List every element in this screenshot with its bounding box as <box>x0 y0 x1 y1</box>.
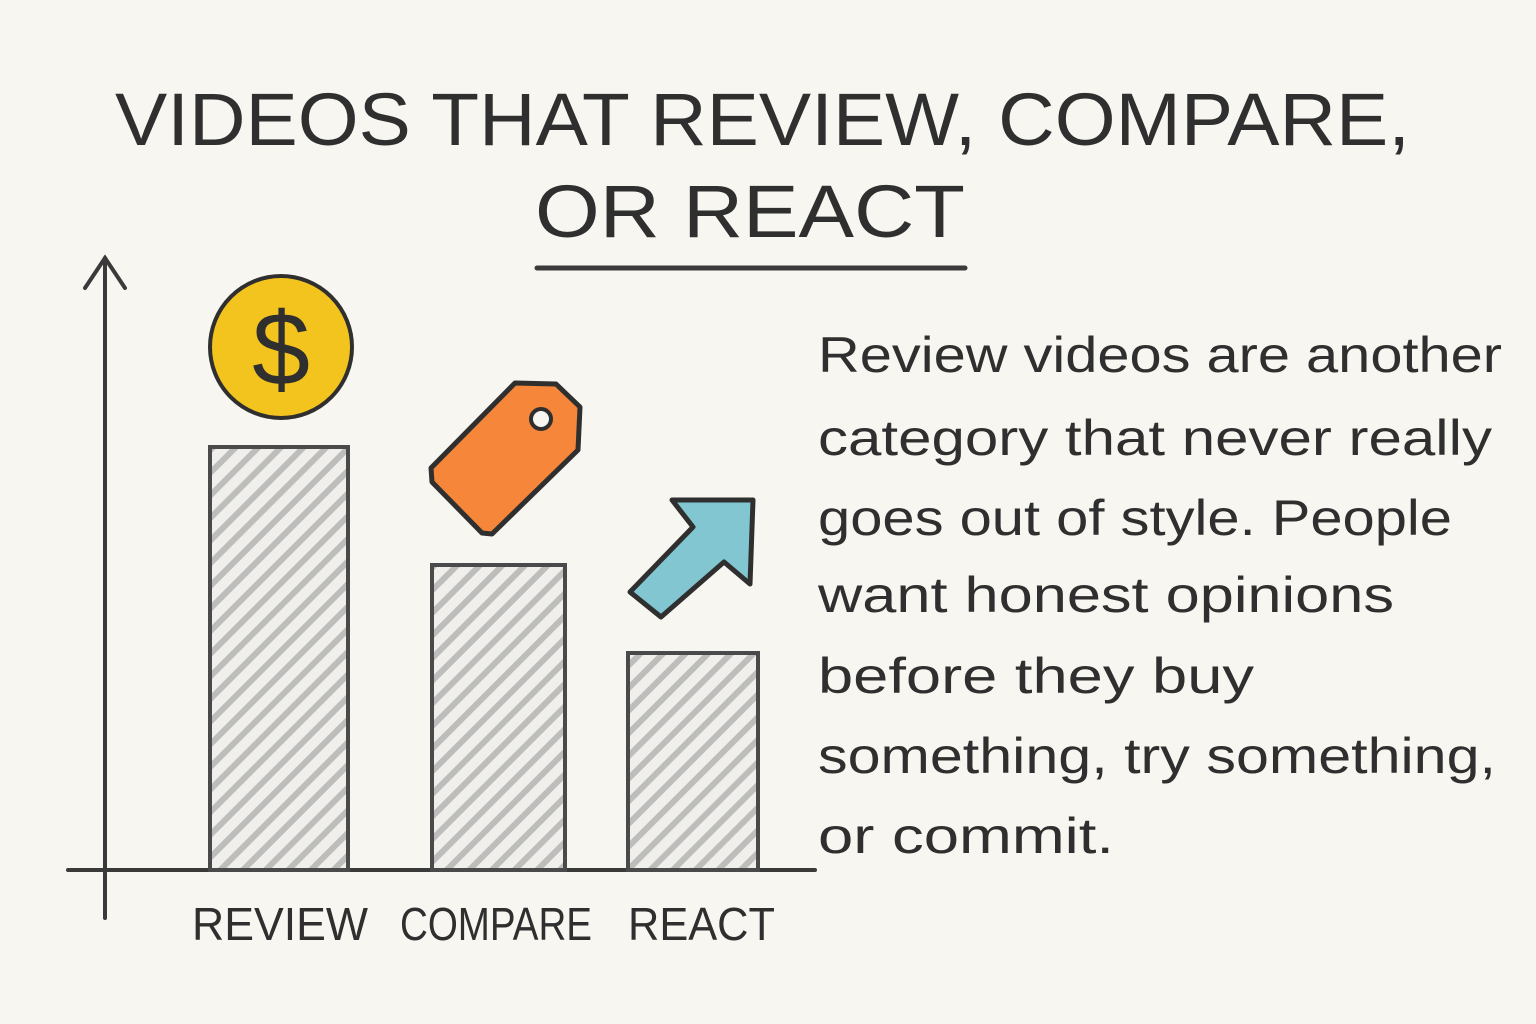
body text: or commit. <box>818 808 1114 864</box>
bar labels: REACT <box>628 898 775 950</box>
bar: review <box>210 447 348 870</box>
body text: Review videos are another <box>818 327 1502 383</box>
title <box>115 78 1410 253</box>
body text: goes out of style. People <box>818 490 1452 546</box>
bar labels: COMPARE <box>400 898 592 950</box>
title underline <box>537 266 965 270</box>
bar labels: REVIEW <box>192 898 369 950</box>
bar chart <box>210 447 758 870</box>
body text <box>817 327 1502 864</box>
body text: before they buy <box>818 648 1254 704</box>
icon: price tag <box>431 383 580 534</box>
icon: up arrow <box>630 500 753 617</box>
bar labels <box>192 898 775 950</box>
body text: something, try something, <box>818 728 1496 784</box>
icon: dollar coin: $ <box>252 292 310 408</box>
body text: category that never really <box>818 410 1492 466</box>
bar: compare <box>432 565 565 870</box>
bar: react <box>628 653 758 870</box>
title: OR REACT <box>535 170 965 253</box>
title: VIDEOS THAT REVIEW, COMPARE, <box>115 78 1410 161</box>
chart axes <box>68 258 815 918</box>
icon: dollar coin <box>210 276 352 418</box>
body text: want honest opinions <box>817 567 1394 623</box>
